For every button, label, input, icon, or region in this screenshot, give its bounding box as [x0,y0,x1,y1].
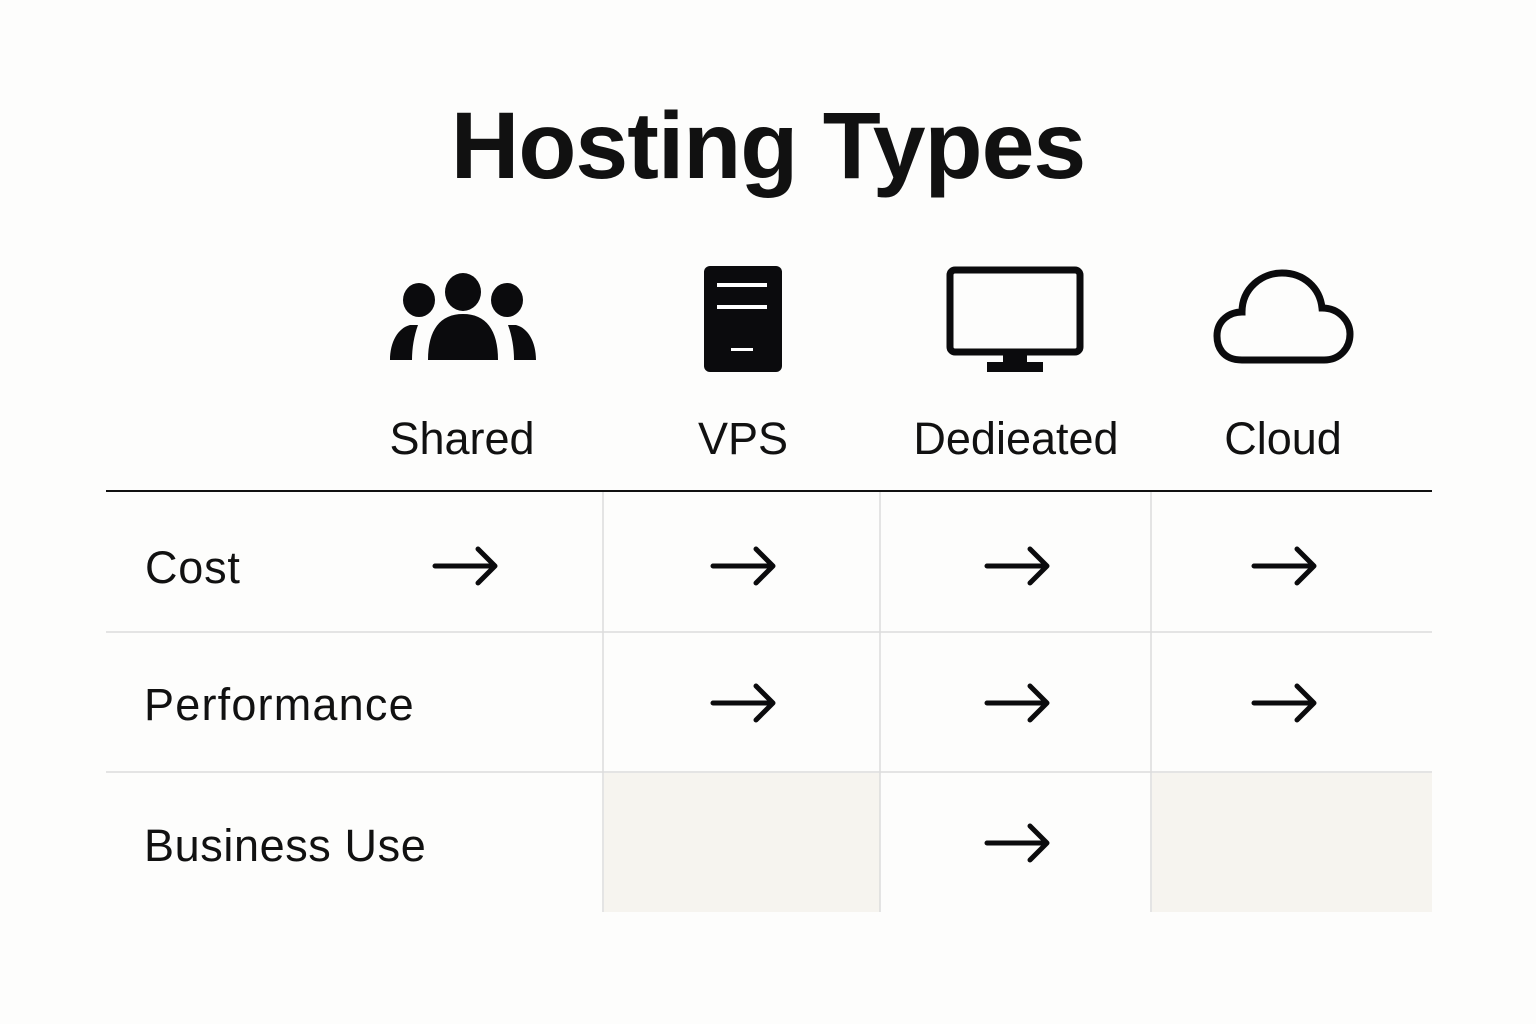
icon: shared people [390,273,536,360]
text: Dedieated [913,413,1119,464]
icon: VPS server [704,266,782,372]
title: Hosting Types [451,93,1085,199]
text: Performance [144,679,415,730]
text: Shared [389,413,535,464]
text: VPS [698,413,788,464]
column headers [389,413,1342,464]
text: Cloud [1224,413,1342,464]
text: Business Use [144,820,426,871]
icon: dedicated monitor [946,266,1084,372]
text: Cost [145,542,241,593]
icon: cloud [1214,270,1354,364]
row labels [144,542,426,871]
